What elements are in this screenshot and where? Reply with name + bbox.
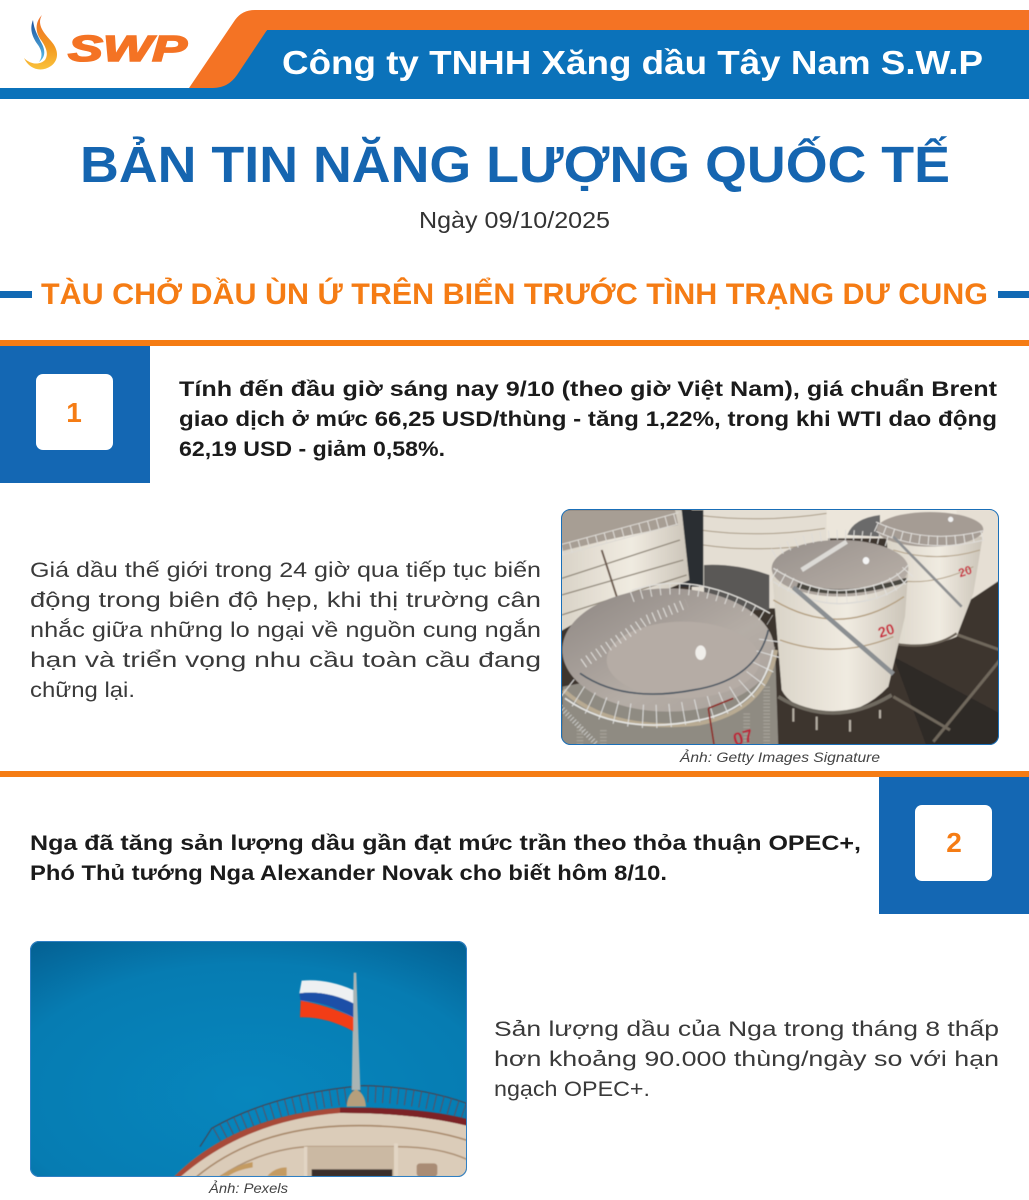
- section 1 paragraph: [30, 558, 541, 702]
- back tanks: [680, 508, 1002, 646]
- flag pole: [347, 973, 366, 1107]
- section 1 headline: giao dịch ở mức 66,25 USD/thùng - tăng 1,22%, trong khi WTI dao động: [179, 408, 997, 431]
- back tanks: 20: [957, 563, 974, 580]
- caption: tanks photo: Ảnh: Getty Images Signature: [679, 750, 880, 765]
- building: [174, 1108, 468, 1177]
- title: BẢN TIN NĂNG LƯỢNG QUỐC TẾ: [80, 135, 950, 193]
- center tank: [772, 535, 908, 732]
- section 2 paragraph: ngạch OPEC+.: [494, 1077, 650, 1101]
- section 2 divider: [0, 771, 1029, 777]
- section 1 paragraph: nhắc giữa những lo ngại về nguồn cung ngắn: [30, 617, 541, 642]
- section 1 paragraph: Giá dầu thế giới trong 24 giờ qua tiếp tục biến: [30, 558, 541, 582]
- number badge 2: 2: [946, 827, 962, 858]
- number badge 2: [879, 777, 1029, 914]
- photo: oil storage tanks: [560, 507, 1003, 750]
- section 1 headline: 62,19 USD - giảm 0,58%.: [179, 438, 445, 461]
- section 1 headline: Tính đến đầu giờ sáng nay 9/10 (theo giờ Việt Nam), giá chuẩn Brent: [179, 378, 997, 401]
- number badge 1: 1: [66, 397, 82, 428]
- railing: [200, 1086, 467, 1147]
- center tank: 20: [876, 622, 897, 642]
- logo: SWP: [68, 28, 188, 69]
- number badge 1: [0, 346, 150, 483]
- date: Ngày 09/10/2025: [419, 207, 610, 233]
- section 2 paragraph: hơn khoảng 90.000 thùng/ngày so với hạn: [494, 1047, 999, 1071]
- top left tank: [560, 510, 689, 632]
- section 1 paragraph: hạn và triển vọng nhu cầu toàn cầu đang: [30, 648, 541, 672]
- section 1 paragraph: động trong biên độ hẹp, khi thị trường cân: [30, 588, 541, 612]
- section 2 headline: [30, 832, 861, 885]
- front left tank: [560, 583, 778, 750]
- section 1 divider: [0, 340, 1029, 346]
- section 2 headline: Nga đã tăng sản lượng dầu gần đạt mức trần theo thỏa thuận OPEC+,: [30, 832, 861, 855]
- section 1 headline: [179, 378, 997, 461]
- flag: [299, 980, 353, 1031]
- section 2 paragraph: Sản lượng dầu của Nga trong tháng 8 thấp: [494, 1017, 999, 1041]
- section 2 headline: Phó Thủ tướng Nga Alexander Novak cho biết hôm 8/10.: [30, 862, 667, 885]
- front left tank: 07: [731, 725, 755, 750]
- caption: flag photo: Ảnh: Pexels: [208, 1181, 288, 1196]
- company name: Công ty TNHH Xăng dầu Tây Nam S.W.P: [282, 44, 983, 81]
- section 1 paragraph: chững lại.: [30, 678, 135, 702]
- section 2 paragraph: [494, 1017, 999, 1101]
- photo: Russian flag on building: [30, 941, 468, 1177]
- logo: [24, 15, 188, 69]
- subheading with side dashes: TÀU CHỞ DẦU ÙN Ứ TRÊN BIỂN TRƯỚC TÌNH TRẠNG DƯ CUNG: [41, 277, 988, 311]
- header banner: [0, 10, 1029, 99]
